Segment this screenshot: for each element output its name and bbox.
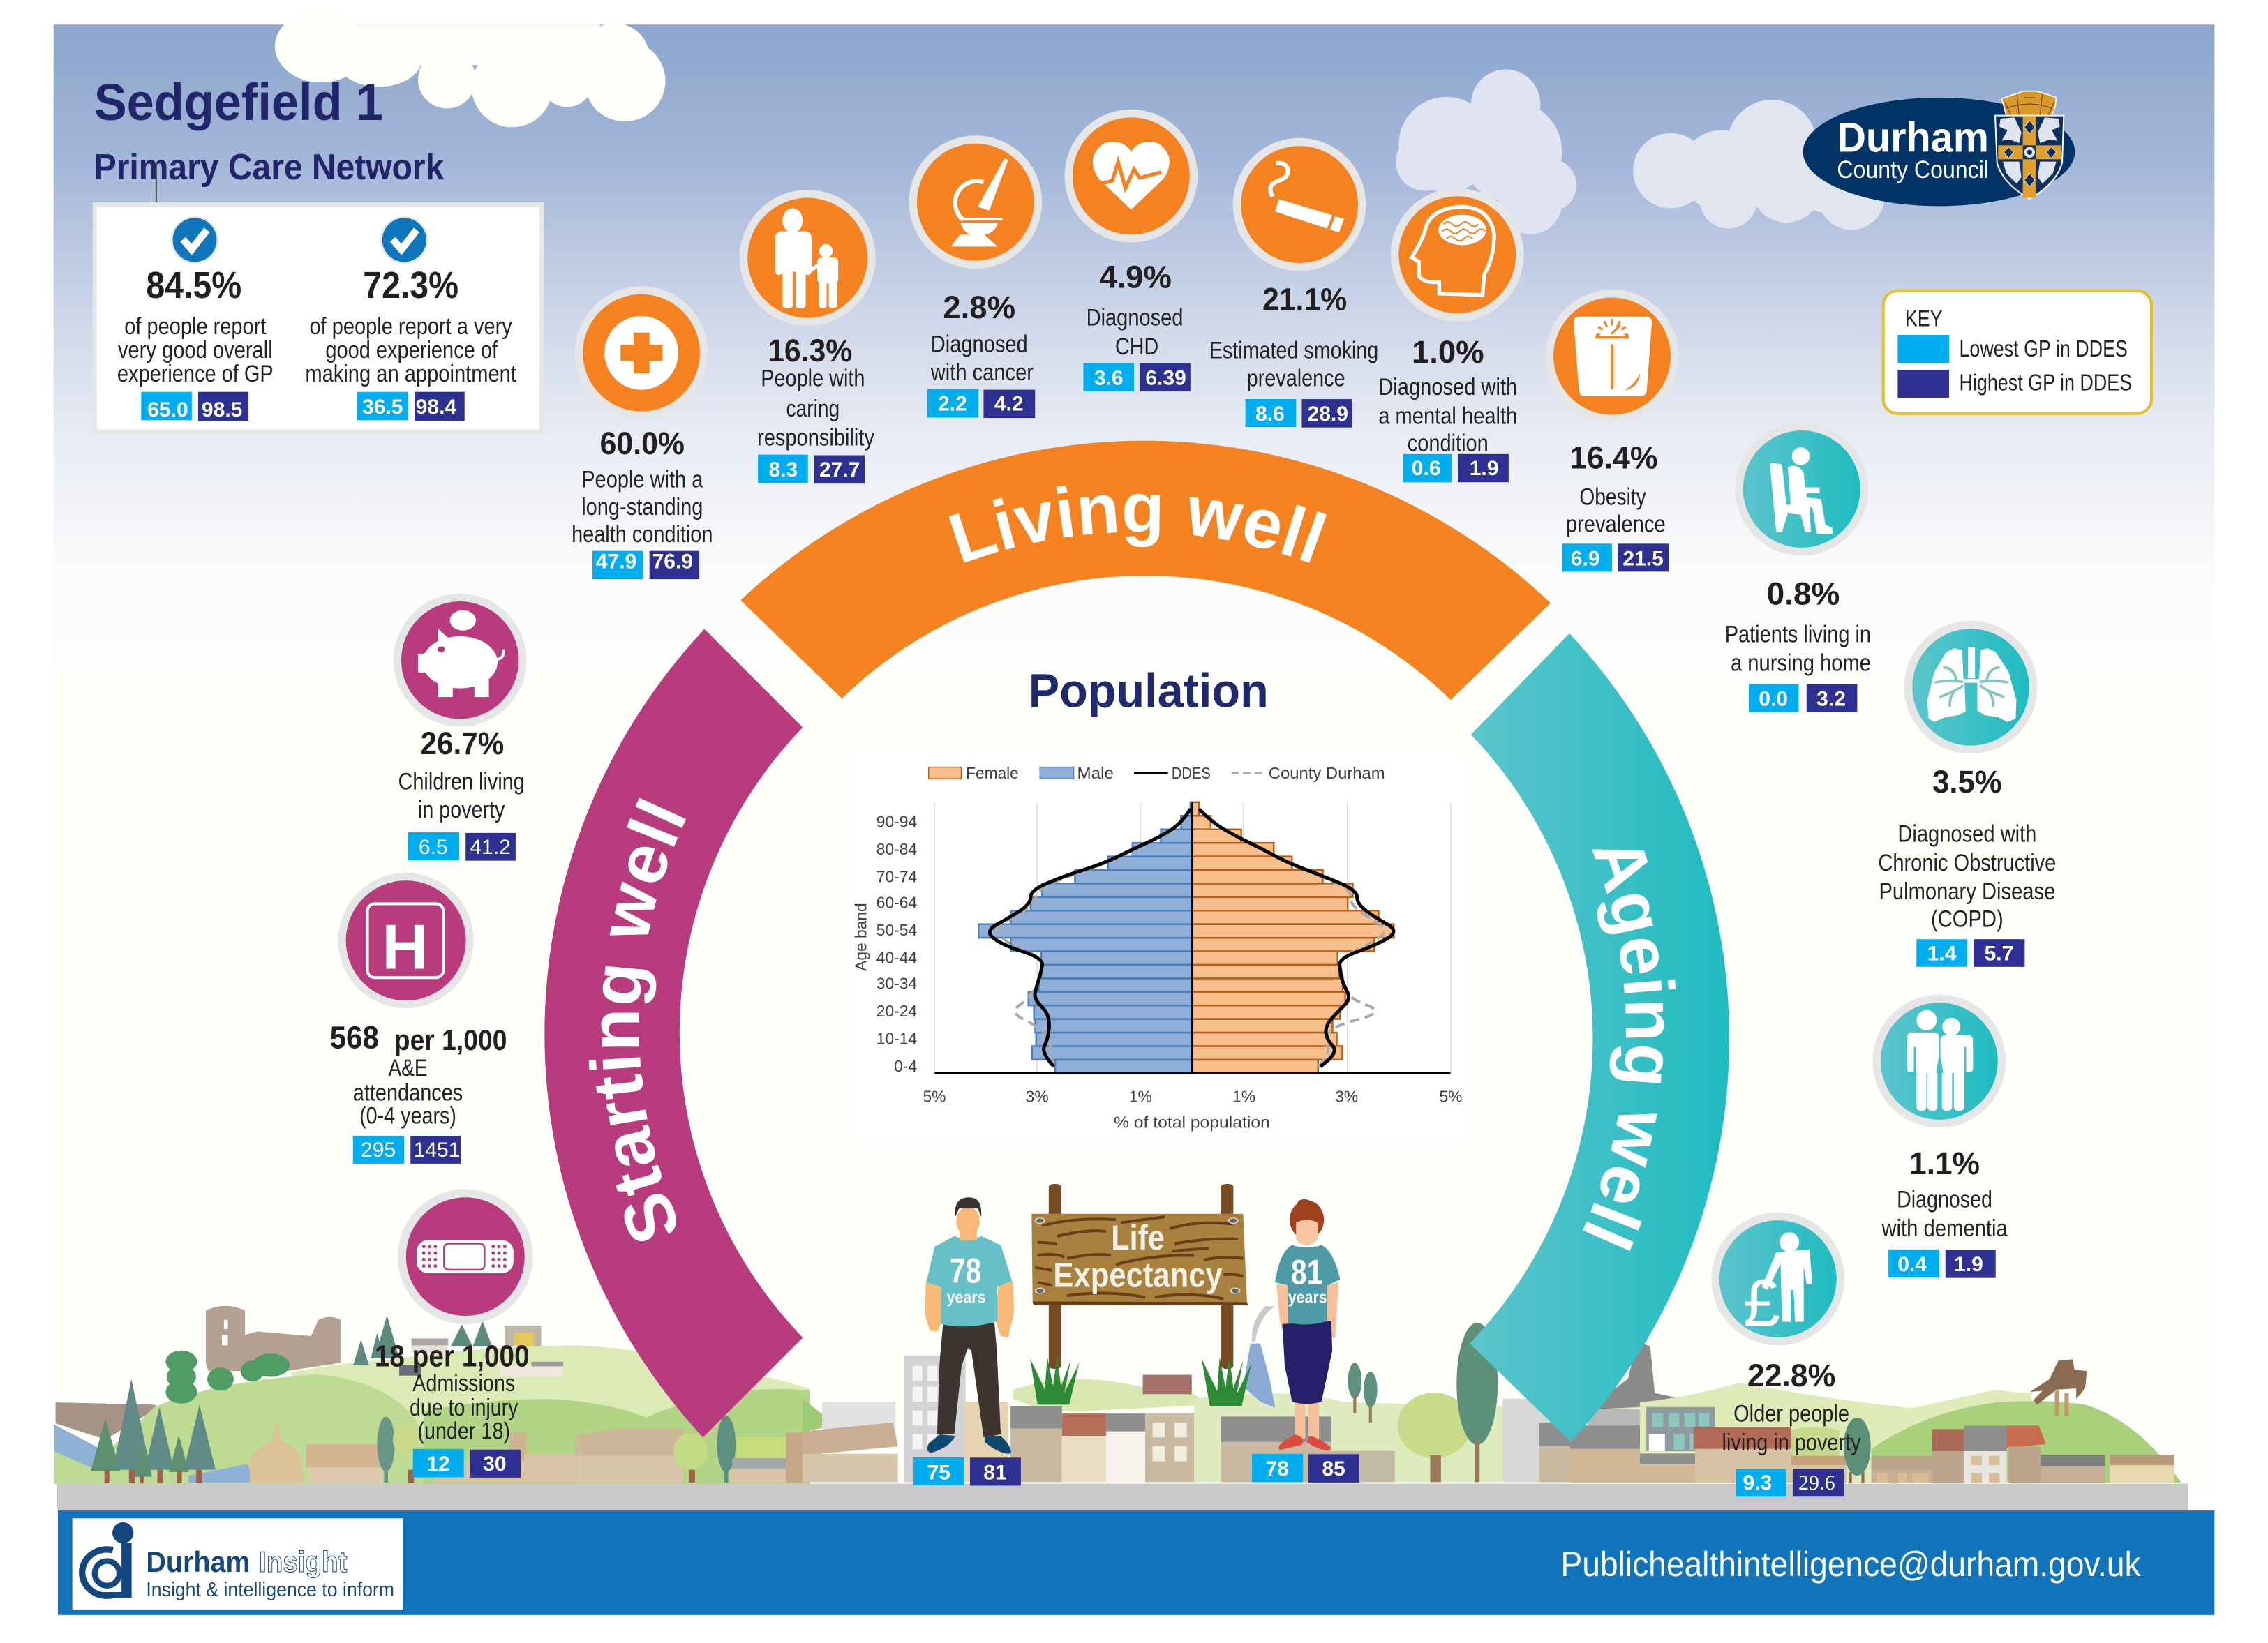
value (330, 1020, 507, 1056)
male range: 75 (927, 1461, 950, 1484)
chart y axis labels: 30-34 (876, 975, 917, 993)
icon: hospital sign: H (382, 912, 428, 983)
icon: head with brain (1391, 188, 1524, 322)
range boxes: 47.9 (596, 550, 636, 573)
arc: Starting well (544, 629, 803, 1437)
description: due to injury (410, 1395, 518, 1421)
range boxes: 29.6 (1798, 1471, 1835, 1494)
chart y axis labels: 10-14 (876, 1029, 917, 1047)
range boxes (1749, 684, 1857, 712)
footer logo: Durham Insight: Durham (146, 1545, 251, 1578)
logo: Durham County Council: Durham (1837, 114, 1989, 161)
range boxes: 1451 (414, 1139, 460, 1162)
footer band (58, 1510, 2214, 1615)
title: Sedgefield 1 (94, 73, 383, 131)
icon: seated person (1735, 423, 1868, 555)
description (757, 365, 875, 451)
footer logo: Durham Insight: Insight (259, 1545, 348, 1578)
key: Highest GP in DDES (1959, 370, 2132, 396)
life expectancy sign (1030, 1184, 1251, 1406)
metric: caring responsibility (740, 190, 876, 483)
chart x axis labels: 3% (1026, 1087, 1049, 1105)
logo: Durham County Council: County Council (1837, 156, 1989, 183)
range boxes (1403, 454, 1509, 482)
metric: long-standing condition (572, 286, 713, 579)
chart x axis labels: 1% (1232, 1087, 1255, 1105)
chart legend: County Durham (1269, 764, 1385, 782)
metric: older people in poverty (1711, 1213, 1861, 1496)
male range (913, 1457, 1021, 1485)
description (1087, 304, 1183, 360)
icon: tick (380, 216, 428, 264)
metric: obesity (1546, 290, 1678, 571)
male value: 78 (950, 1251, 981, 1290)
range boxes: 36.5 (362, 396, 403, 419)
description: a nursing home (1731, 650, 1871, 677)
value: 1.0% (1412, 334, 1484, 370)
male value: years (947, 1289, 986, 1307)
metric: nursing home (1725, 423, 1871, 712)
metric: cancer (909, 135, 1042, 418)
female range: 78 (1265, 1457, 1289, 1480)
icon: older person with pound sign (1711, 1213, 1844, 1345)
description (1725, 621, 1871, 677)
description (1209, 337, 1378, 391)
value: 26.7% (421, 726, 504, 761)
description: condition (1408, 430, 1489, 457)
range boxes: 41.2 (470, 836, 511, 859)
female range: 85 (1322, 1457, 1345, 1480)
range boxes: 2.2 (938, 393, 967, 416)
description: in poverty (418, 797, 505, 823)
arc: Ageing well (1470, 633, 1729, 1441)
chart legend: Female (966, 764, 1019, 782)
description (353, 1055, 463, 1129)
description: CHD (1115, 333, 1158, 360)
footer logo: Durham Insight: Insight & intelligence to inform (146, 1579, 394, 1601)
range boxes: 98.4 (416, 396, 456, 419)
value: 568 (330, 1020, 379, 1056)
description (572, 466, 713, 548)
arc: Living well: Living well (949, 486, 1327, 563)
icon: horse and rider (2030, 1359, 2087, 1416)
range boxes: 98.5 (202, 398, 242, 421)
range boxes (927, 389, 1035, 418)
description: Older people (1733, 1400, 1849, 1427)
key: Lowest GP in DDES (1959, 336, 2128, 362)
landscape: left (54, 1306, 810, 1484)
range boxes: 76.9 (652, 550, 693, 573)
range boxes: 8.3 (768, 458, 798, 481)
description (1378, 374, 1517, 457)
range boxes: 0.4 (1897, 1253, 1927, 1276)
description: (under 18) (417, 1418, 510, 1444)
description (1566, 483, 1666, 538)
range boxes: 65.0 (147, 398, 188, 421)
range boxes: 6.9 (1571, 547, 1600, 570)
metric: A&E attendances (330, 873, 507, 1164)
value: per 1,000 (394, 1023, 507, 1056)
range boxes: 5.7 (1985, 942, 2013, 965)
metric: children in poverty (394, 594, 526, 861)
chart y axis labels: 90-94 (876, 813, 917, 831)
arc: Starting well: Starting well (589, 798, 687, 1242)
heading: Population: Population (1029, 665, 1269, 718)
value: 84.5% (146, 264, 241, 306)
range boxes: 30 (483, 1453, 507, 1476)
description (117, 313, 274, 387)
range boxes: 3.6 (1094, 366, 1124, 389)
description: prevalence (1247, 365, 1345, 391)
description: experience of GP (117, 361, 274, 387)
range boxes: 0.0 (1759, 687, 1788, 710)
description: prevalence (1566, 511, 1666, 538)
description: Children living (398, 769, 525, 795)
panel: GP experience (95, 204, 542, 432)
description: of people report a very (310, 313, 513, 340)
metric: dementia (1873, 995, 2008, 1278)
description: making an appointment (305, 361, 516, 387)
range boxes (592, 550, 699, 579)
cloud: top left (275, 10, 665, 127)
chart legend (929, 764, 1385, 782)
description: Admissions (412, 1370, 515, 1397)
chart y axis labels: 80-84 (876, 840, 917, 858)
ddes lines (990, 809, 1394, 1067)
description: caring (786, 396, 840, 422)
sign text: Life (1111, 1218, 1165, 1257)
range boxes: 21.5 (1622, 547, 1664, 570)
description: Diagnosed (1897, 1187, 1992, 1213)
value: 21.1% (1262, 282, 1347, 317)
description: health condition (572, 521, 713, 548)
range boxes: 28.9 (1308, 403, 1348, 426)
description: People with a (581, 466, 703, 493)
description: Diagnosed (931, 331, 1028, 358)
chart x axis labels (923, 1087, 1462, 1105)
range boxes: 3.2 (1816, 687, 1846, 710)
icon: plaster (398, 1189, 533, 1324)
metric: smoking (1209, 138, 1378, 428)
range boxes: 1.9 (1470, 457, 1498, 480)
description: Diagnosed with (1378, 374, 1517, 400)
description: People with (761, 365, 865, 391)
description (398, 769, 525, 823)
icon: couple (1873, 995, 2006, 1127)
key: KEY (1905, 306, 1943, 331)
description: (COPD) (1931, 906, 2004, 933)
icon: piggy bank (394, 594, 526, 727)
male figure (913, 1197, 1021, 1485)
landscape: centre (803, 1306, 1570, 1482)
description: with dementia (1881, 1215, 2008, 1242)
range boxes (353, 1136, 461, 1164)
male value (947, 1251, 986, 1307)
description: Diagnosed with (1897, 820, 2036, 847)
chart y axis labels (876, 813, 917, 1075)
chart y axis title: Age band (852, 903, 870, 971)
description (1878, 820, 2056, 933)
metric: injury admissions (375, 1189, 533, 1478)
range boxes: 8.6 (1255, 403, 1285, 426)
landscape: right (1570, 1342, 2181, 1483)
sign text: Expectancy (1053, 1256, 1223, 1295)
value: 16.4% (1569, 440, 1658, 476)
description (305, 313, 516, 387)
female value (1288, 1253, 1327, 1307)
female figure (1252, 1199, 1359, 1483)
range boxes: 6.39 (1145, 366, 1186, 389)
sign text (1053, 1218, 1223, 1295)
female bars (1192, 802, 1394, 1073)
description: attendances (353, 1079, 463, 1106)
range boxes (357, 392, 465, 421)
metric: appointment experience (305, 216, 516, 421)
chart y axis labels: 0-4 (894, 1057, 917, 1075)
road strip (57, 1484, 2188, 1510)
icon: cigarette (1233, 138, 1366, 271)
chart y axis labels: 40-44 (876, 948, 917, 966)
key (1883, 291, 2151, 414)
description (930, 331, 1034, 386)
icon: weighing scales (1546, 290, 1678, 423)
chart legend: DDES (1172, 764, 1211, 782)
description: Chronic Obstructive (1878, 850, 2056, 876)
value: 60.0% (600, 426, 685, 461)
description (410, 1370, 518, 1444)
chart y axis labels: 70-74 (876, 867, 917, 885)
icon: hospital sign (338, 873, 474, 1008)
range boxes (1083, 363, 1191, 391)
description: Estimated smoking (1209, 337, 1378, 363)
range boxes (1562, 543, 1669, 571)
range boxes: 1.9 (1954, 1253, 1983, 1276)
chart x axis title: % of total population (1114, 1113, 1270, 1132)
range boxes: 12 (426, 1453, 450, 1476)
chart y axis labels: 20-24 (876, 1002, 917, 1020)
footer logo: Durham Insight (73, 1518, 403, 1610)
icon: microscope (909, 135, 1042, 269)
value: 1.1% (1909, 1146, 1980, 1181)
value: 22.8% (1747, 1358, 1835, 1393)
description: a mental health (1378, 403, 1517, 429)
value: 0.8% (1767, 576, 1840, 611)
range boxes (141, 392, 248, 421)
range boxes (1246, 399, 1352, 428)
value: 3.5% (1932, 764, 2002, 800)
value: 72.3% (363, 264, 458, 306)
female value: 81 (1291, 1253, 1322, 1292)
range boxes: 1.4 (1927, 942, 1957, 965)
icon: older person with pound sign: £ (1743, 1267, 1780, 1341)
range boxes (1916, 939, 2024, 967)
male range: 81 (983, 1461, 1007, 1484)
metric: mental health (1378, 188, 1524, 482)
range boxes: 9.3 (1743, 1471, 1772, 1494)
description: Pulmonary Disease (1879, 878, 2055, 905)
metric: CHD (1065, 110, 1198, 391)
range boxes: 4.2 (994, 393, 1024, 416)
icon: parent and child (740, 190, 876, 326)
value: 16.3% (768, 333, 852, 368)
range boxes (758, 455, 865, 483)
description: living in poverty (1722, 1430, 1861, 1456)
icon: tick (171, 216, 218, 264)
description: Diagnosed (1087, 304, 1183, 331)
value: 2.8% (943, 290, 1015, 325)
description: responsibility (757, 424, 875, 451)
range boxes: 295 (361, 1139, 396, 1162)
chart y axis labels: 60-64 (876, 894, 917, 912)
chart: population pyramid (852, 752, 1468, 1142)
logo: Durham County Council (1803, 91, 2075, 206)
icon: lungs (1904, 621, 2037, 753)
icon: medical cross (575, 286, 708, 419)
description: long-standing (581, 494, 703, 520)
range boxes (408, 832, 516, 861)
cloud: top right (1633, 100, 1885, 230)
arc: Living well (740, 441, 1551, 700)
arc: Ageing well: Ageing well (1583, 849, 1676, 1251)
description (1722, 1400, 1861, 1456)
description: A&E (389, 1055, 427, 1081)
description: (0-4 years) (359, 1102, 456, 1129)
range boxes (413, 1449, 521, 1478)
range boxes: 6.5 (419, 836, 448, 859)
chart x axis labels: 5% (1439, 1087, 1462, 1105)
range boxes (1736, 1469, 1844, 1496)
range boxes: 27.7 (819, 458, 860, 481)
county durham lines (999, 809, 1384, 1067)
range boxes (1888, 1250, 1996, 1278)
chart x axis labels: 1% (1129, 1087, 1152, 1105)
cloud: top centre (1396, 69, 1576, 234)
description: Patients living in (1725, 621, 1871, 647)
range boxes: 0.6 (1412, 457, 1441, 480)
icon: heart with pulse (1065, 110, 1198, 243)
subtitle: Primary Care Network (94, 147, 444, 187)
metric: overall GP experience (117, 216, 274, 421)
description: with cancer (930, 359, 1034, 386)
description: Obesity (1579, 483, 1646, 510)
metric: COPD (1878, 621, 2056, 967)
value: 18 per 1,000 (375, 1340, 530, 1374)
female value: years (1288, 1289, 1327, 1307)
value: 4.9% (1099, 259, 1172, 294)
description (1881, 1187, 2008, 1242)
description: good experience of (325, 337, 498, 363)
chart y axis labels: 50-54 (876, 921, 917, 939)
description: very good overall (118, 337, 273, 363)
male bars (978, 802, 1192, 1073)
chart x axis labels: 5% (923, 1087, 946, 1105)
footer email: Publichealthintelligence@durham.gov.uk (1560, 1545, 2141, 1584)
female range (1252, 1454, 1359, 1483)
description: of people report (124, 313, 267, 340)
chart x axis labels: 3% (1335, 1087, 1358, 1105)
chart legend: Male (1077, 764, 1114, 782)
